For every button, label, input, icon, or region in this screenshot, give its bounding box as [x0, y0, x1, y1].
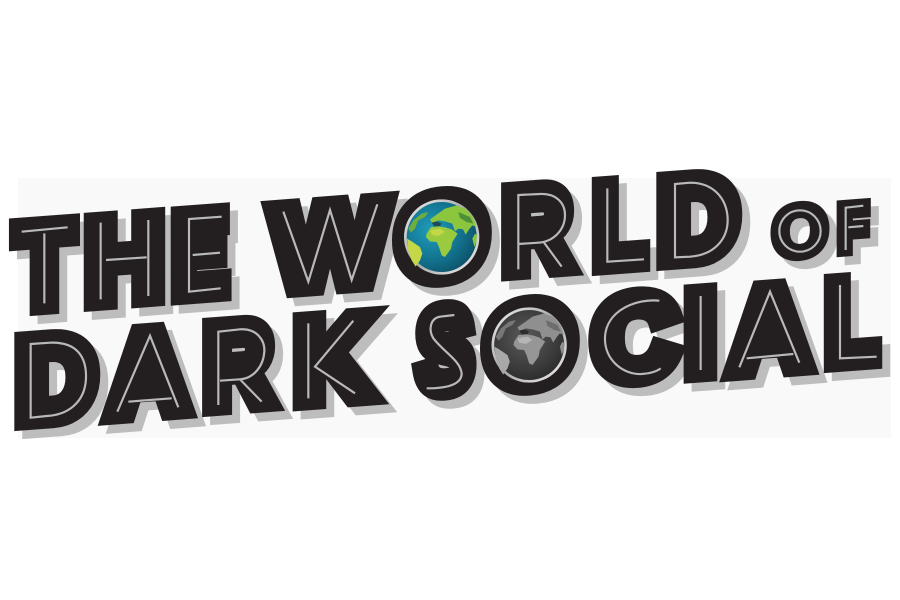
icon: greyscale globe [491, 307, 567, 383]
word: SOCIAL: O [485, 278, 575, 413]
background panel [18, 178, 891, 438]
word: WORLD: R [503, 164, 571, 297]
title lettering [16, 151, 877, 446]
word: WORLD: W [274, 177, 387, 314]
icon: colour globe [404, 199, 479, 275]
word: SOCIAL: C [593, 271, 677, 405]
word: SOCIAL: I [686, 268, 715, 399]
word: DARK: K [295, 293, 371, 426]
word: DARK: A [109, 305, 187, 440]
word: THE [16, 188, 228, 332]
word: SOCIAL: A [730, 261, 809, 396]
word: SOCIAL: S [417, 284, 473, 417]
inline strokes, left half [22, 204, 462, 418]
word: WORLD: D [659, 151, 737, 286]
word: THE: H [86, 192, 163, 327]
word: THE: E [172, 188, 228, 321]
word: SOCIAL [417, 256, 877, 417]
word: OF: F [838, 192, 868, 266]
inline strokes, right half [518, 183, 877, 374]
word: THE: T [16, 200, 73, 332]
word: OF: O [772, 190, 828, 274]
word: DARK: D [17, 311, 95, 446]
word: DARK: R [204, 299, 272, 432]
word: DARK [17, 293, 371, 446]
word: WORLD: L [594, 159, 645, 291]
word: WORLD [274, 151, 737, 314]
word: WORLD: O [397, 170, 487, 305]
word: SOCIAL: L [826, 256, 877, 388]
word: OF [772, 190, 868, 274]
